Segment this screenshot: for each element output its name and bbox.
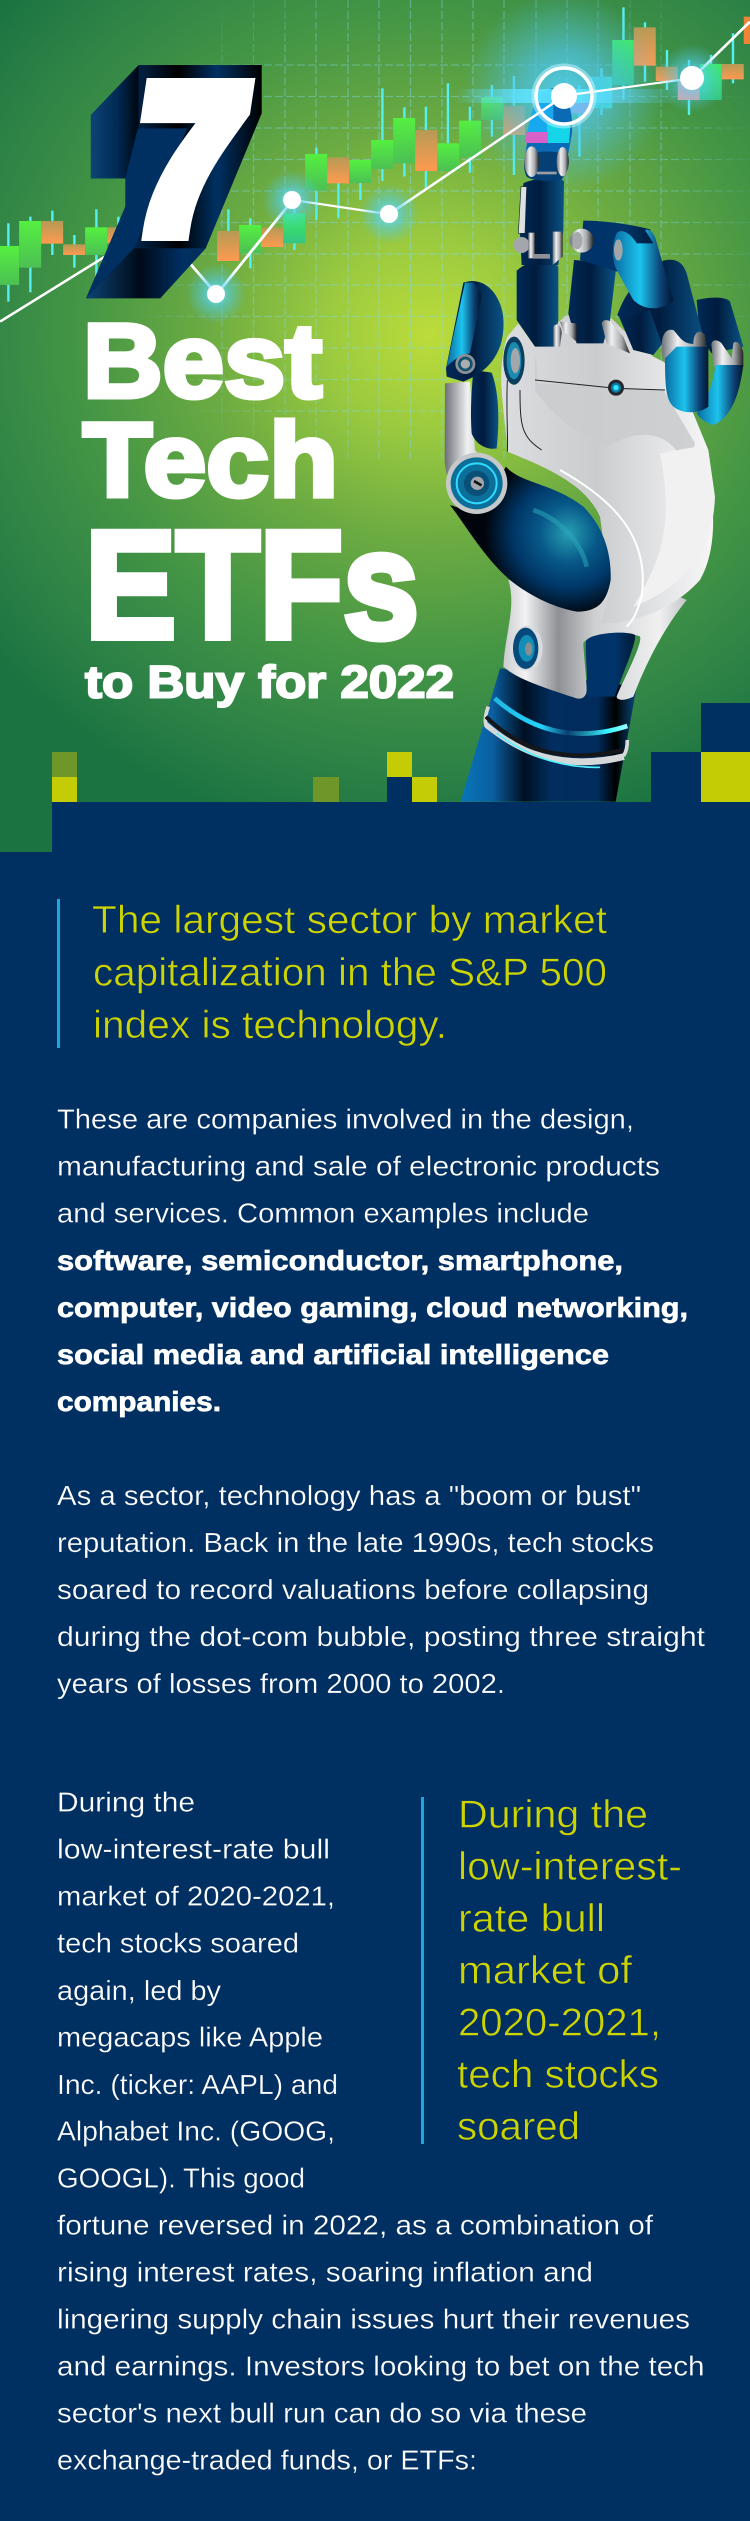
paragraph: bull market: lingering supply chain issues hurt their revenues <box>57 2304 690 2334</box>
hero banner <box>0 0 750 852</box>
paragraph: sector definition: manufacturing and sale of electronic products <box>57 1150 660 1182</box>
thumb lower silver <box>445 382 510 520</box>
big 3D number 7 <box>86 45 262 298</box>
paragraph: bull market: market of 2020-2021, <box>57 1880 335 1912</box>
forearm muscle <box>450 467 611 612</box>
seven numeral: 7 <box>120 45 259 273</box>
thumb pivot <box>455 354 475 374</box>
quote bar <box>421 1797 424 2144</box>
palm seam <box>507 380 665 452</box>
hero headline: Best <box>83 303 322 420</box>
pinky finger <box>697 298 743 425</box>
chart grid <box>146 0 750 459</box>
hero headline: to Buy for 2022 <box>85 656 454 708</box>
seven extrusion <box>86 65 262 298</box>
index finger <box>514 88 572 347</box>
quote bar <box>57 899 60 1048</box>
wrist cuff <box>503 580 687 700</box>
paragraph: bull market: fortune reversed in 2022, as a combination of <box>57 2210 653 2240</box>
thumb tip <box>446 281 504 382</box>
paragraph: bull market: and earnings. Investors looking to bet on the tech <box>57 2350 704 2382</box>
paragraph: boom or bust <box>57 1480 705 1699</box>
chart nodes <box>186 44 726 324</box>
paragraph: bull market: tech stocks soared <box>57 1928 299 1958</box>
pull quote: low-interest-rate bull market: soared <box>457 2106 580 2148</box>
paragraph: bull market: During the <box>57 1786 195 1818</box>
paragraph: bull market: GOOGL). This good <box>57 2162 305 2194</box>
paragraph: bull market: exchange-traded funds, or ETFs: <box>57 2444 477 2476</box>
pixel squares <box>52 703 750 802</box>
ring finger base <box>618 290 667 355</box>
paragraph: bold examples: software, semiconductor, smartphone, <box>57 1245 623 1276</box>
candlestick chart <box>0 7 750 302</box>
thumb joint <box>446 453 507 514</box>
paragraph: bold examples <box>57 1245 688 1417</box>
pull quote: largest sector <box>57 899 607 1048</box>
forearm <box>461 668 637 802</box>
paragraph: bull market: again, led by <box>57 1975 221 2006</box>
paragraph: bull market: megacaps like Apple <box>57 2022 323 2052</box>
ring finger <box>617 260 708 412</box>
paragraph: boom or bust: reputation. Back in the late 1990s, tech stocks <box>57 1527 654 1558</box>
paragraph: boom or bust: years of losses from 2000 to 2002. <box>57 1668 505 1699</box>
thumb upper lower section <box>471 370 498 449</box>
paragraph: boom or bust: As a sector, technology has a "boom or bust" <box>57 1480 641 1511</box>
paragraph: sector definition: These are companies involved in the design, <box>57 1104 634 1134</box>
palm pivot <box>503 337 525 385</box>
wrist opening <box>586 633 635 697</box>
hero background gradient <box>0 0 750 852</box>
paragraph: bull market: Inc. (ticker: AAPL) and <box>57 2069 338 2100</box>
paragraph: bull market: Alphabet Inc. (GOOG, <box>57 2116 335 2146</box>
wrist screw <box>511 626 543 671</box>
pull quote: low-interest-rate bull market <box>421 1794 682 2148</box>
palm <box>501 315 713 623</box>
navy content panel <box>0 802 750 2521</box>
pull quote: low-interest-rate bull market: tech stocks <box>457 2054 659 2096</box>
hero headline: ETFs <box>85 500 419 670</box>
paragraph: sector definition: and services. Common examples include <box>57 1198 589 1228</box>
paragraph: bull market: rising interest rates, soaring inflation and <box>57 2256 593 2288</box>
flare through active node <box>455 89 680 103</box>
trend line <box>0 22 750 322</box>
palm inner curve highlight <box>560 470 643 627</box>
paragraph: bold examples: companies. <box>57 1386 221 1417</box>
pull quote: largest sector: index is technology. <box>93 1004 447 1047</box>
middle finger <box>560 221 673 353</box>
palm centre shading <box>535 357 695 477</box>
paragraph: bull market: low-interest-rate bull <box>57 1834 330 1864</box>
paragraph: bold examples: social media and artificial intelligence <box>57 1339 609 1370</box>
palm screw <box>608 380 624 396</box>
pull quote: low-interest-rate bull market: 2020-2021, <box>458 2002 661 2044</box>
pull quote: low-interest-rate bull market: During the <box>458 1794 648 1836</box>
pull quote: low-interest-rate bull market: market of <box>458 1950 632 1992</box>
hero headline: Tech <box>83 402 338 519</box>
muscle highlight <box>533 510 587 567</box>
pull quote: largest sector: capitalization in the S&P 500 <box>93 952 607 994</box>
paragraph: bull market: sector's next bull run can do so via these <box>57 2398 587 2428</box>
paragraph: boom or bust: soared to record valuations before collapsing <box>57 1574 649 1605</box>
paragraph: boom or bust: during the dot-com bubble, posting three straight <box>57 1621 705 1652</box>
paragraph: sector definition <box>57 1104 660 1228</box>
pull quote: largest sector: The largest sector by market <box>92 899 607 942</box>
pull quote: low-interest-rate bull market: low-interest- <box>458 1846 682 1888</box>
paragraph: bull market <box>57 1786 704 2476</box>
paragraph: bold examples: computer, video gaming, cloud networking, <box>57 1292 688 1323</box>
pull quote: low-interest-rate bull market: rate bull <box>458 1898 605 1940</box>
forearm rings <box>485 698 627 767</box>
palm back highlight <box>633 447 715 607</box>
hero headline <box>83 303 454 708</box>
glow behind active chart node <box>464 0 664 192</box>
robot hand <box>445 88 743 802</box>
thumb tip cyan edge <box>447 283 481 367</box>
